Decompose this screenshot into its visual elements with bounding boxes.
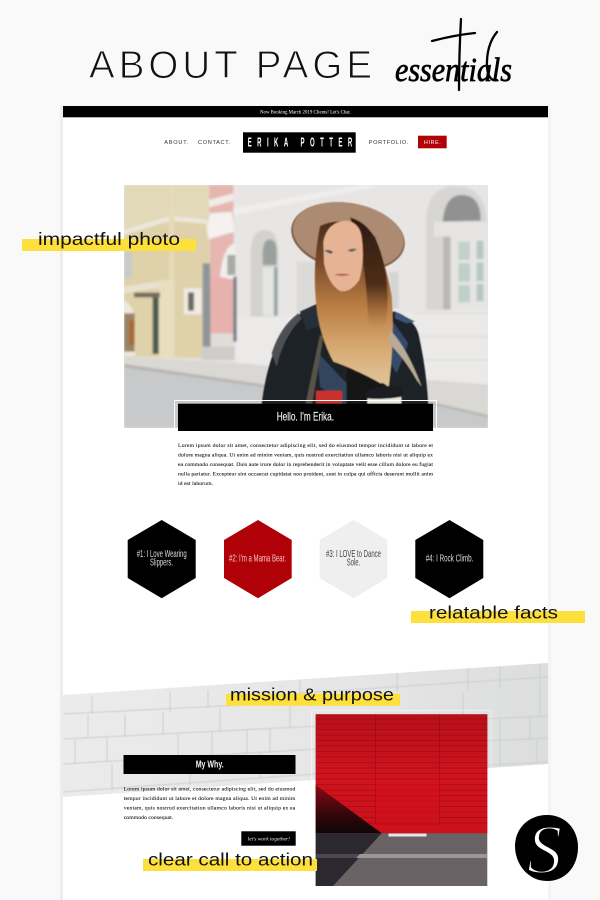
intro paragraph [178,443,434,487]
intro paragraph: dolore magna aliqua. Ut enim ad minim veniam, quis nostrud exercitation ullamco laboris nisi ut aliquip ex [178,452,433,458]
label: relatable facts: relatable facts [429,602,558,622]
hexagon fact 1 [128,520,196,598]
hat [290,202,406,267]
title: about page: ABOUT PAGE [89,44,372,87]
hexagon fact 2: #2: I'm a Mama Bear. [229,552,286,564]
hair [315,222,393,387]
white building [232,185,238,316]
mission paragraph: commodo consequat. [124,815,174,821]
intro paragraph: ea commodo consequat. Duis aute irure dolor in reprehenderit in voluptate velit esse cillum dolore eu fugiat [178,461,433,468]
my why heading [124,755,296,774]
hexagon fact 2 [224,520,292,598]
brand logo badge: S [527,812,562,889]
label: mission and purpose: mission & purpose [230,685,394,705]
hexagon fact 1: Slippers. [150,557,173,569]
shirt [346,368,383,404]
hero photo [124,185,488,428]
hexagon fact 4: #4: I Rock Climb. [426,552,473,564]
intro paragraph: Lorem ipsum dolor sit amet, consectetur adipiscing elit, sed do eiusmod tempor incididunt ut labore et [178,443,433,449]
intro paragraph: id est laborum. [178,481,214,487]
mission paragraph: tempor incididunt ut labore et dolore magna aliqua. Ut enim ad minim [124,796,296,802]
face [323,221,363,291]
intro paragraph: nulla pariatur. Excepteur sint occaecat cupidatat non proident, sunt in culpa qui officia deserunt mollit anim [178,470,434,478]
navigation [164,132,447,153]
title [89,19,512,90]
title: essentials script: essentials [395,52,512,89]
navigation: ABOUT. [164,140,189,146]
mission paragraph: Lorem ipsum dolor sit amet, consectetur adipiscing elit, sed do eiusmod [124,786,295,792]
navigation: CONTACT. [198,140,231,146]
left yellow building [124,216,210,360]
hexagon fact 3 [320,520,387,598]
label: impactful photo: impactful photo [38,229,180,249]
title: essentials script [395,19,512,90]
hire button [418,136,447,148]
coffee cup [366,396,402,404]
neck [333,280,362,320]
announcement bar [63,106,548,117]
mission paragraph [124,786,296,821]
label: clear call to action: clear call to action [148,850,313,870]
red wall photo [312,710,491,886]
label: relatable facts [411,602,585,623]
hexagon fact 1: #1: I Love Wearing [137,548,187,560]
mission paragraph: veniam, quis nostrud exercitation ullamco laboris nisi ut aliquip ex ea [124,806,296,812]
ground [124,367,488,428]
pink building [208,185,235,296]
hexagon fact 4 [415,520,483,598]
panel: website mockup [60,106,551,900]
hello banner [174,400,436,431]
hexagon fact 3: Sole. [347,557,360,569]
hello banner: Hello. I'm Erika. [277,410,334,424]
logo box: ERIKA POTTER [248,136,352,150]
jacket [262,304,428,407]
label: impactful photo [22,229,196,251]
brick wall band [63,660,548,800]
call to action button [241,831,296,846]
hexagon fact 3: #3: I LOVE to Dance [326,548,381,560]
announcement bar: Now Booking March 2019 Clients! Let's Chat. [260,110,351,116]
navigation: PORTFOLIO. [369,140,409,146]
logo box [243,132,356,153]
woman [262,194,428,407]
call to action button: let's work together! [248,836,290,842]
brand logo badge [515,812,578,889]
my why heading: My Why. [196,758,224,770]
hire button: HIRE. [424,140,441,146]
